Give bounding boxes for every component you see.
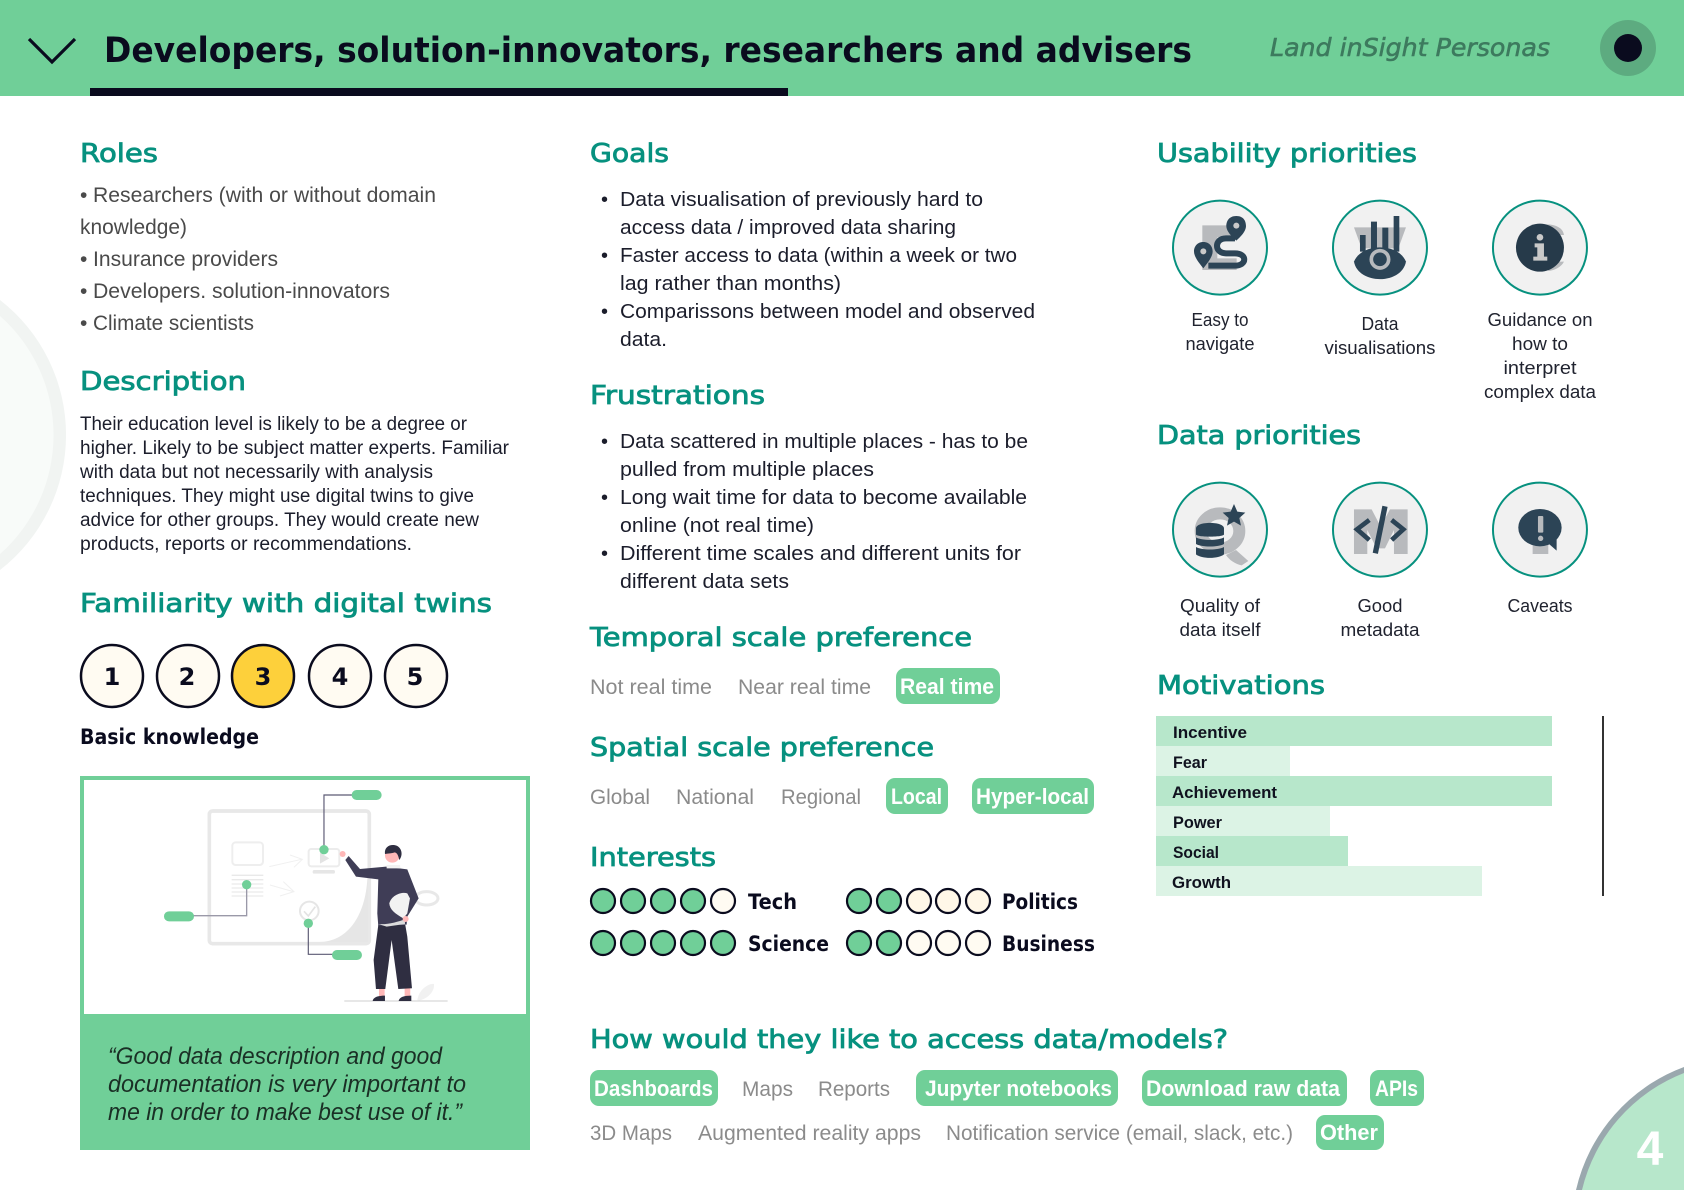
bar chart: motivations xyxy=(1156,716,1604,896)
label: guidance: interpret xyxy=(1504,358,1576,378)
goals list: • xyxy=(601,301,608,323)
options: access row one: Download raw data xyxy=(1146,1076,1341,1101)
panel: illustration and quote xyxy=(80,778,530,1150)
label: easy to navigate xyxy=(1186,310,1254,354)
rating scale: 1 xyxy=(104,663,120,691)
label: good metadata: Good xyxy=(1358,596,1402,616)
options: access row one: Dashboards xyxy=(594,1076,713,1101)
label: quality of data xyxy=(1180,596,1262,640)
options: spatial: Local xyxy=(891,784,942,809)
options: spatial: Regional xyxy=(781,786,861,809)
options: spatial: Hyper-local xyxy=(976,784,1089,809)
quote xyxy=(80,1014,530,1150)
panel: description xyxy=(79,367,510,555)
page number badge: 4 xyxy=(1637,1123,1664,1176)
interest: politics xyxy=(847,889,1078,914)
description text: Their education level is likely to be a degree or xyxy=(80,414,468,435)
panel: interests xyxy=(590,843,1095,956)
icon: data visualisations xyxy=(1333,201,1427,295)
roles list: Researchers (with or without domain xyxy=(93,184,436,207)
bar chart: motivations: Growth xyxy=(1172,873,1231,892)
heading: frustrations: Frustrations xyxy=(590,381,765,411)
goals list: Faster access to data (within a week or two xyxy=(620,245,1017,267)
label: caveats: Caveats xyxy=(1508,596,1572,616)
frustrations list: pulled from multiple places xyxy=(620,459,874,481)
panel: roles xyxy=(80,139,436,335)
panel: data access xyxy=(590,1025,1424,1150)
goals list: Data visualisation of previously hard to xyxy=(620,189,983,211)
label: guidance xyxy=(1484,310,1597,402)
panel: familiarity with digital twins xyxy=(80,589,492,749)
rating scale: 4 xyxy=(332,663,348,691)
roles list: Climate scientists xyxy=(93,312,254,335)
interest: science: Science xyxy=(748,932,829,956)
goals list: data. xyxy=(620,329,667,351)
rating scale: 3 xyxy=(255,663,271,691)
frustrations list: Data scattered in multiple places - has to be xyxy=(620,431,1028,453)
bar chart: motivations: Achievement xyxy=(1172,783,1277,802)
frustrations list xyxy=(601,431,1028,593)
options: temporal: Not real time xyxy=(590,676,712,699)
label: easy to navigate: Easy to xyxy=(1192,310,1248,330)
roles list: • xyxy=(80,312,87,335)
goals list: lag rather than months) xyxy=(620,273,841,295)
icon: guidance xyxy=(1493,201,1587,295)
panel: frustrations xyxy=(590,381,1028,593)
options: temporal: Real time xyxy=(900,674,994,699)
icon: persona dot xyxy=(1600,20,1656,76)
description text: with data but not necessarily with analysis xyxy=(79,462,433,483)
frustrations list: different data sets xyxy=(620,571,789,593)
options: access row two: 3D Maps xyxy=(590,1122,672,1145)
bar chart: motivations: Social xyxy=(1173,843,1219,862)
heading: usability priorities: Usability priorities xyxy=(1157,139,1417,169)
description text: techniques. They might use digital twins to give xyxy=(80,486,474,507)
heading: familiarity: Familiarity with digital twins xyxy=(80,589,492,619)
goals list: • xyxy=(601,189,608,211)
frustrations list: Long wait time for data to become available xyxy=(620,487,1027,509)
icon: quality of data xyxy=(1173,483,1267,577)
roles list xyxy=(80,184,436,335)
panel: data priorities xyxy=(1157,421,1587,640)
options: spatial: National xyxy=(676,786,754,809)
rating scale: 2 xyxy=(179,663,195,691)
roles list: • xyxy=(80,184,87,207)
heading: goals: Goals xyxy=(590,139,669,169)
options: access row one xyxy=(590,1070,1424,1106)
heading: roles: Roles xyxy=(80,139,158,169)
heading: data access: How would they like to access data/models? xyxy=(590,1025,1228,1055)
goals list: • xyxy=(601,245,608,267)
interest: business xyxy=(847,931,1095,956)
icon: good metadata xyxy=(1333,483,1427,577)
quote: me in order to make best use of it.” xyxy=(108,1099,463,1126)
interest: tech: Tech xyxy=(748,890,797,914)
frustrations list: • xyxy=(601,487,608,509)
label: good metadata: metadata xyxy=(1340,620,1421,640)
header band xyxy=(0,0,1684,96)
options: spatial: Global xyxy=(590,786,650,809)
bar chart: motivations: Fear xyxy=(1173,753,1207,772)
description text: products, reports or recommendations. xyxy=(80,534,412,555)
label: guidance: complex data xyxy=(1484,382,1597,402)
label: good metadata xyxy=(1340,596,1421,640)
description text: higher. Likely to be subject matter experts. Familiar xyxy=(80,438,510,459)
label: data visualisations xyxy=(1324,314,1436,358)
heading: spatial scale: Spatial scale preference xyxy=(590,733,934,763)
description text xyxy=(79,414,510,555)
heading: description: Description xyxy=(80,367,246,397)
bar chart: motivations: Power xyxy=(1173,813,1222,832)
quote: “Good data description and good xyxy=(108,1043,443,1070)
rating scale xyxy=(81,645,447,707)
heading: interests: Interests xyxy=(590,843,716,873)
roles list: Developers. solution-innovators xyxy=(93,280,390,303)
frustrations list: online (not real time) xyxy=(620,515,814,537)
interest: tech xyxy=(591,889,797,914)
options: access row one: Reports xyxy=(818,1078,890,1101)
panel: goals xyxy=(590,139,1035,351)
roles list: • xyxy=(80,248,87,271)
heading: motivations: Motivations xyxy=(1157,671,1325,701)
goals list: Comparissons between model and observed xyxy=(620,301,1035,323)
goals list: access data / improved data sharing xyxy=(620,217,956,239)
rating scale: 5 xyxy=(407,663,423,691)
frustrations list: Different time scales and different units for xyxy=(620,543,1021,565)
label: quality of data: Quality of xyxy=(1180,596,1261,616)
roles list: Insurance providers xyxy=(93,248,278,271)
label: data visualisations: visualisations xyxy=(1324,338,1436,358)
options: access row two: Augmented reality apps xyxy=(698,1122,921,1145)
options: temporal: Near real time xyxy=(738,676,871,699)
options: access row one: Jupyter notebooks xyxy=(925,1076,1112,1101)
background decorative circle xyxy=(0,300,66,570)
panel: usability priorities xyxy=(1157,139,1597,402)
icon: chevron xyxy=(29,39,75,62)
interest: politics: Politics xyxy=(1002,890,1078,914)
label: guidance: Guidance on xyxy=(1488,310,1592,330)
options: temporal xyxy=(590,668,1000,704)
options: spatial xyxy=(590,778,1094,814)
options: access row one: Maps xyxy=(742,1078,793,1101)
heading: data priorities: Data priorities xyxy=(1157,421,1361,451)
label: guidance: how to xyxy=(1512,334,1568,354)
description text: advice for other groups. They would create new xyxy=(80,510,479,531)
series label: Land inSight Personas xyxy=(1270,33,1550,62)
illustration: person at screen xyxy=(164,790,448,1001)
icon: caveats xyxy=(1493,483,1587,577)
label: easy to navigate: navigate xyxy=(1186,334,1254,354)
interest: business: Business xyxy=(1002,932,1095,956)
roles list: knowledge) xyxy=(80,216,187,239)
heading: temporal scale: Temporal scale preference xyxy=(589,623,972,653)
interest: science xyxy=(591,931,829,956)
options: access row one: APIs xyxy=(1375,1076,1418,1101)
options: access row two xyxy=(590,1115,1384,1150)
goals list xyxy=(601,189,1035,351)
rating label: Basic knowledge xyxy=(80,725,259,749)
page number badge xyxy=(1576,1067,1684,1190)
options: access row two: Other xyxy=(1320,1120,1378,1145)
icon: easy to navigate xyxy=(1173,201,1267,295)
panel: motivations xyxy=(1156,671,1604,896)
panel: spatial scale preference xyxy=(590,733,1094,814)
label: data visualisations: Data xyxy=(1362,314,1399,334)
options: access row two: Notification service (email, slack, etc.) xyxy=(946,1122,1293,1145)
frustrations list: • xyxy=(601,543,608,565)
bar chart: motivations: Incentive xyxy=(1173,723,1247,742)
frustrations list: • xyxy=(601,431,608,453)
roles list: • xyxy=(80,280,87,303)
quote: documentation is very important to xyxy=(108,1071,466,1098)
title: Developers, solution-innovators, researchers and advisers xyxy=(104,31,1192,71)
panel: temporal scale preference xyxy=(589,623,1000,704)
label: quality of data: data itself xyxy=(1180,620,1262,640)
